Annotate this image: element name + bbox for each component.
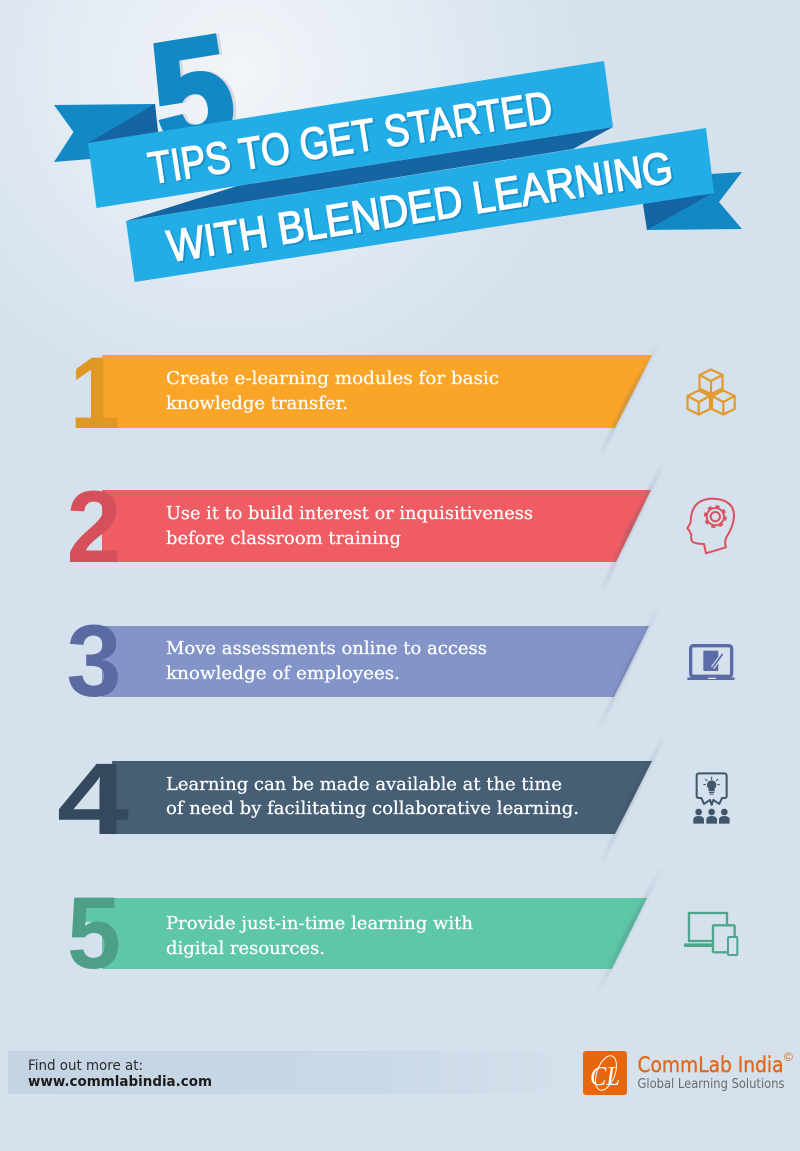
logo mark: CL xyxy=(590,1061,620,1091)
icon: laptop, tablet and phone xyxy=(684,913,737,955)
tip 4 text: of need by facilitating collaborative learning. xyxy=(166,798,579,819)
tip 1 text: Create e-learning modules for basic xyxy=(166,368,499,389)
logo name: CommLab India xyxy=(638,1053,784,1077)
icon: cubes xyxy=(688,370,735,414)
panel: tip 3 xyxy=(66,600,735,733)
left ribbon fold xyxy=(88,104,158,143)
numeral 4: 4 xyxy=(57,742,129,856)
footer label: Find out more at: xyxy=(28,1058,143,1074)
middle ribbon fold xyxy=(126,127,613,221)
ribbon: with blended learning: WITH BLENDED LEARNING xyxy=(164,142,676,272)
right ribbon tail xyxy=(643,172,742,230)
icon: presentation with audience xyxy=(693,773,730,824)
copyright mark: © xyxy=(784,1050,793,1064)
panel: tip 2 xyxy=(66,460,734,595)
panel: tip 4 xyxy=(57,730,730,866)
left ribbon tail xyxy=(54,104,158,162)
bar 4 xyxy=(112,761,652,834)
shadow fold 5 xyxy=(597,865,663,995)
bar 2 xyxy=(102,490,651,562)
shadow fold 3 xyxy=(597,600,662,733)
tip 5 text: digital resources. xyxy=(166,938,325,959)
numeral 3: 3 xyxy=(66,604,122,718)
numeral 2: 2 xyxy=(66,470,122,584)
tip 3 text: knowledge of employees. xyxy=(166,663,400,684)
logo: CommLab India xyxy=(583,1050,793,1095)
logo mark xyxy=(583,1051,627,1095)
bar 5 xyxy=(85,898,647,969)
tip 3 text: Move assessments online to access xyxy=(166,638,487,659)
panel: tip 5 xyxy=(67,865,737,995)
big numeral 5: 5 xyxy=(141,4,244,180)
icon: laptop with document xyxy=(687,646,735,680)
title banner xyxy=(54,4,742,282)
big numeral 5: 5 xyxy=(144,4,247,180)
footer url: www.commlabindia.com xyxy=(28,1074,212,1090)
panel: tip 1 xyxy=(70,336,735,460)
tip 4 text: Learning can be made available at the time xyxy=(166,774,562,795)
ribbon: with blended learning: WITH BLENDED LEARNING xyxy=(166,143,678,273)
footer: find out more band xyxy=(8,1051,583,1094)
numeral 1: 1 xyxy=(70,336,120,450)
tip 1 text: knowledge transfer. xyxy=(166,393,348,414)
tip 2 text: Use it to build interest or inquisitiveness xyxy=(166,503,533,524)
shadow fold 4 xyxy=(600,730,667,866)
tip 5 text: Provide just-in-time learning with xyxy=(166,913,473,934)
logo tagline: Global Learning Solutions xyxy=(638,1077,785,1092)
numeral 5: 5 xyxy=(67,876,121,990)
shadow fold 1 xyxy=(598,340,660,460)
ribbon: tips to get started: TIPS TO GET STARTED xyxy=(145,81,556,194)
tip 2 text: before classroom training xyxy=(166,528,401,549)
bar 1 xyxy=(102,355,652,428)
icon: head with gear xyxy=(687,499,734,553)
ribbon: tips to get started: TIPS TO GET STARTED xyxy=(147,83,558,195)
shadow fold 2 xyxy=(600,460,665,595)
bar 3 xyxy=(102,626,649,697)
